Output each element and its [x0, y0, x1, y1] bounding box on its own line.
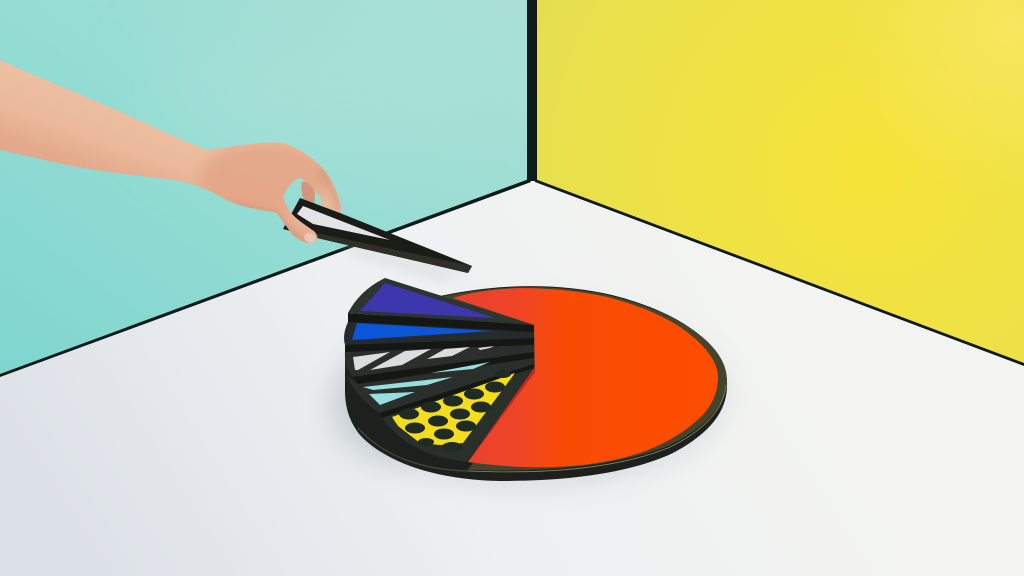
rim highlight line	[468, 385, 726, 472]
floor shadow of pie	[330, 303, 725, 487]
polka dots	[399, 370, 511, 452]
teal left wall	[0, 0, 530, 376]
hand and arm	[0, 60, 341, 246]
lifted white slice	[283, 198, 472, 273]
yellow polka dot slice	[382, 368, 534, 462]
thumbnail	[303, 232, 317, 244]
wedge shadow on floor	[345, 240, 470, 282]
teal striped slice	[347, 358, 534, 419]
pie rim top	[440, 287, 727, 471]
blue slice	[344, 322, 534, 353]
white striped slice	[345, 345, 534, 385]
pie chart	[344, 278, 727, 481]
red large slice	[453, 288, 718, 467]
pie base side	[345, 286, 727, 481]
base layer line	[358, 428, 468, 471]
white floor	[0, 180, 1024, 576]
black wall edges and corner	[0, 0, 1024, 377]
red slice shaded corner	[468, 366, 535, 462]
hand shading	[200, 142, 338, 246]
yellow right wall	[535, 0, 1024, 366]
purple slice	[348, 278, 534, 333]
back finger behind slice	[301, 182, 315, 206]
